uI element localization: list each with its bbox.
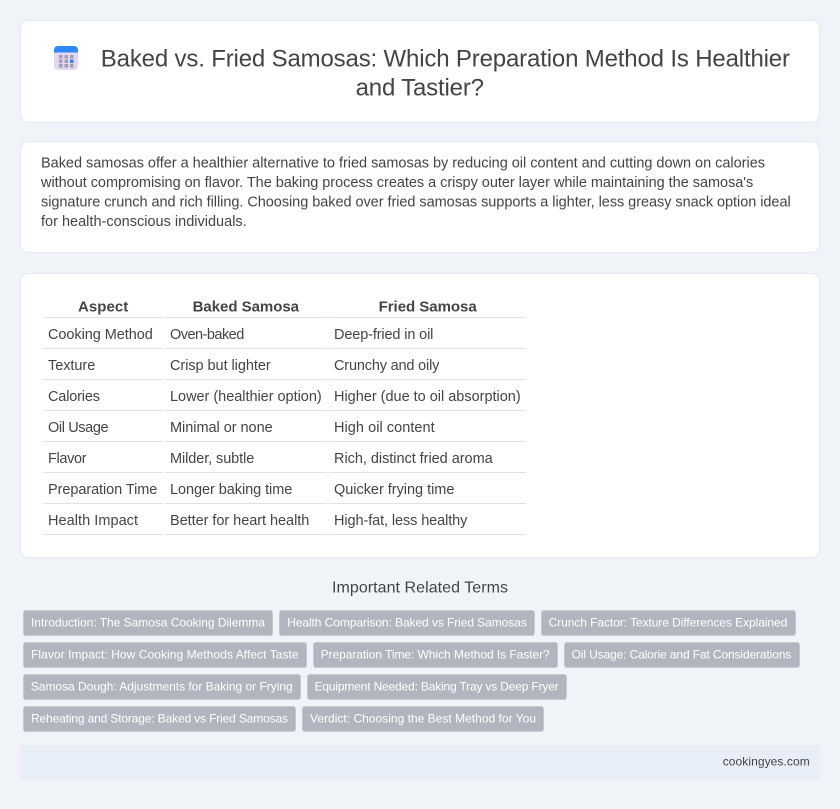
title: Baked vs. Fried Samosas: Which Preparation Method Is Healthier [101,46,790,73]
row: health impact: Better for heart health [170,513,309,529]
row: preparation time: Preparation Time [48,482,157,498]
row: flavor: Milder, subtle [170,451,254,467]
related term tags: Verdict: Choosing the Best Method for You [310,712,536,726]
intro paragraph: signature crunch and rich filling. Choosing baked over fried samosas supports a lighter, less greasy snack option ideal [41,195,791,211]
row: preparation time: Quicker frying time [334,482,454,498]
row: cooking method [43,327,526,349]
related term tags: Samosa Dough: Adjustments for Baking or Frying [31,680,293,694]
related term tags: Introduction: The Samosa Cooking Dilemma [31,616,265,630]
table header row: Fried Samosa [379,299,477,316]
row: flavor: Rich, distinct fried aroma [334,451,494,467]
row: flavor [43,451,526,473]
related term tags: Preparation Time: Which Method Is Faster? [321,648,550,662]
related term tags: Flavor Impact: How Cooking Methods Affect Taste [31,648,299,662]
table header row: Aspect [78,299,128,316]
row: oil usage: Oil Usage [48,420,109,436]
panel: header [20,20,820,122]
panel: comparison table [20,274,820,558]
row: health impact: Health Impact [48,513,138,529]
table header row: Baked Samosa [193,299,300,316]
row: preparation time [43,482,526,504]
intro paragraph: for health-conscious individuals. [41,214,247,230]
row: cooking method: Deep-fried in oil [334,327,433,343]
related term tags: Reheating and Storage: Baked vs Fried Samosas [31,712,288,726]
icon: calendar [54,46,78,70]
heading: related terms: Important Related Terms [332,580,508,596]
related term tags [24,610,800,732]
panel: intro text [20,142,820,252]
row: oil usage [43,420,526,442]
related term tags: Crunch Factor: Texture Differences Explained [549,616,787,630]
related term tags: Equipment Needed: Baking Tray vs Deep Fryer [315,680,559,694]
row: calories: Higher (due to oil absorption) [334,389,521,405]
row: preparation time: Longer baking time [170,482,292,498]
related term tags: Health Comparison: Baked vs Fried Samosas [287,616,527,630]
footer [20,745,820,779]
row: calories [43,389,526,411]
title: and Tastier? [356,75,484,102]
row: calories: Lower (healthier option) [170,389,322,405]
table header row [43,299,526,318]
row: health impact [43,513,526,535]
intro paragraph: without compromising on flavor. The baking process creates a crispy outer layer while maintaining the samosa's [40,175,753,191]
footer source: cookingyes.com [723,755,810,769]
row: texture: Texture [48,358,95,374]
row: cooking method: Oven-baked [170,327,244,343]
row: texture [43,358,526,380]
row: cooking method: Cooking Method [48,327,153,343]
related term tags: Oil Usage: Calorie and Fat Considerations [572,648,791,662]
row: oil usage: High oil content [334,420,435,436]
row: flavor: Flavor [48,451,87,467]
intro paragraph: Baked samosas offer a healthier alternative to fried samosas by reducing oil content and cutting down on calories [41,155,765,171]
row: oil usage: Minimal or none [170,420,273,436]
row: health impact: High-fat, less healthy [334,513,468,529]
row: texture: Crisp but lighter [170,358,271,374]
row: calories: Calories [48,389,100,405]
row: texture: Crunchy and oily [334,358,440,374]
